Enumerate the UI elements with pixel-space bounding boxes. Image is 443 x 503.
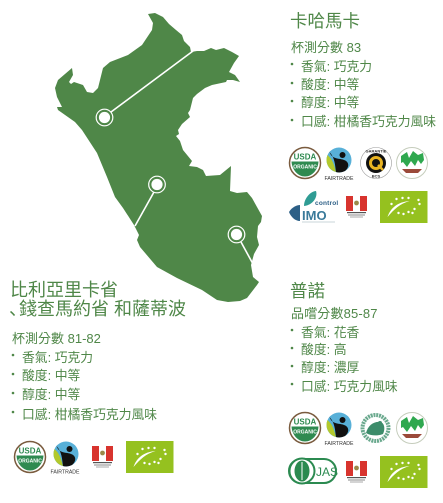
certification logos — [289, 148, 428, 223]
icon: EU organic leaf — [380, 191, 428, 223]
icon: Fairtrade: FAIRTRADE — [324, 176, 354, 182]
bullet list: 口感: 柑橘香巧克力風味 — [22, 407, 157, 422]
bullet list: 香氣: 巧克力 — [301, 59, 372, 74]
heading: Bellavista, Chanchamayo and Satipo: 、 — [9, 295, 27, 321]
connector line: Cajamarca — [111, 51, 193, 112]
heading: Cajamarca: 卡哈馬卡 — [290, 11, 360, 31]
icon: Peru seal — [346, 196, 367, 218]
heading: Puno: 普諾 — [290, 281, 325, 301]
icon: Fairtrade — [50, 442, 80, 476]
cup score: 杯測分數 81-82 — [12, 331, 101, 346]
icon: QCS guarantee: BCS — [372, 174, 381, 178]
icon: IMO control: IMO — [302, 208, 327, 223]
icon: Peru seal — [346, 461, 367, 482]
bullet list: 酸度: 中等 — [22, 368, 81, 383]
icon: USDA organic: USDA — [294, 152, 317, 162]
heading: Bellavista, Chanchamayo and Satipo — [9, 280, 186, 321]
certification logos — [14, 441, 174, 476]
icon: USDA organic — [290, 148, 320, 178]
bullet list: 醇度: 濃厚 — [301, 360, 360, 375]
panel: Puno — [289, 281, 428, 488]
marker: Puno — [228, 226, 245, 243]
icon: Fairtrade: FAIRTRADE — [50, 470, 80, 476]
bullet list: 口感: 柑橘香巧克力風味 — [301, 114, 436, 129]
panel: Bellavista, Chanchamayo and Satipo — [9, 280, 186, 476]
icon: IMO control — [289, 191, 338, 223]
icon: USDA organic — [290, 412, 320, 444]
icon: green forest seal — [396, 148, 428, 178]
bullet list: 口感: 巧克力風味 — [301, 379, 398, 394]
heading: Bellavista, Chanchamayo and Satipo: 比利亞里卡省 — [10, 280, 118, 300]
icon: IMO control: control — [315, 200, 338, 207]
icon: USDA organic: ORGANIC — [293, 164, 317, 170]
marker: Pichanaki — [149, 176, 165, 193]
panel: Cajamarca — [289, 11, 436, 223]
certification logos — [289, 412, 428, 488]
bullet list: 醇度: 中等 — [22, 387, 81, 402]
icon: EU organic leaf — [380, 456, 428, 488]
bullet list: 香氣: 花香 — [301, 325, 360, 340]
icon: green forest seal — [396, 412, 428, 444]
bullet list: 醇度: 中等 — [301, 95, 360, 110]
bullet list — [291, 325, 398, 394]
icon: USDA organic: USDA — [19, 446, 42, 456]
bullet list — [291, 59, 436, 129]
connector line: Pichanaki — [135, 192, 154, 226]
icon: JAS: JAS — [316, 465, 338, 479]
icon: Fairtrade: FAIRTRADE — [324, 441, 354, 447]
icon: Rainforest Alliance — [362, 415, 388, 441]
connector line: Puno — [241, 242, 253, 264]
icon: QCS guarantee — [360, 148, 392, 178]
icon: USDA organic — [14, 442, 46, 472]
bullet list: 酸度: 中等 — [301, 77, 360, 92]
bullet list: 香氣: 巧克力 — [22, 350, 93, 365]
cup score: 杯測分數 83 — [291, 40, 361, 55]
cupping score: 品嚐分數85-87 — [291, 306, 378, 321]
icon: QCS guarantee: GARANTIE — [366, 148, 387, 154]
icon: Peru seal — [92, 446, 113, 468]
heading: Bellavista, Chanchamayo and Satipo: 錢查馬約省 和薩蒂波 — [19, 299, 186, 319]
icon: USDA organic: ORGANIC — [293, 430, 317, 436]
bullet list — [12, 350, 157, 422]
bullet list: 酸度: 高 — [301, 342, 347, 357]
icon: USDA organic: ORGANIC — [18, 458, 42, 464]
icon: EU organic leaf — [126, 441, 174, 473]
icon: USDA organic: USDA — [294, 418, 317, 426]
marker: Cajamarca — [96, 109, 113, 126]
map of Peru — [55, 13, 262, 302]
